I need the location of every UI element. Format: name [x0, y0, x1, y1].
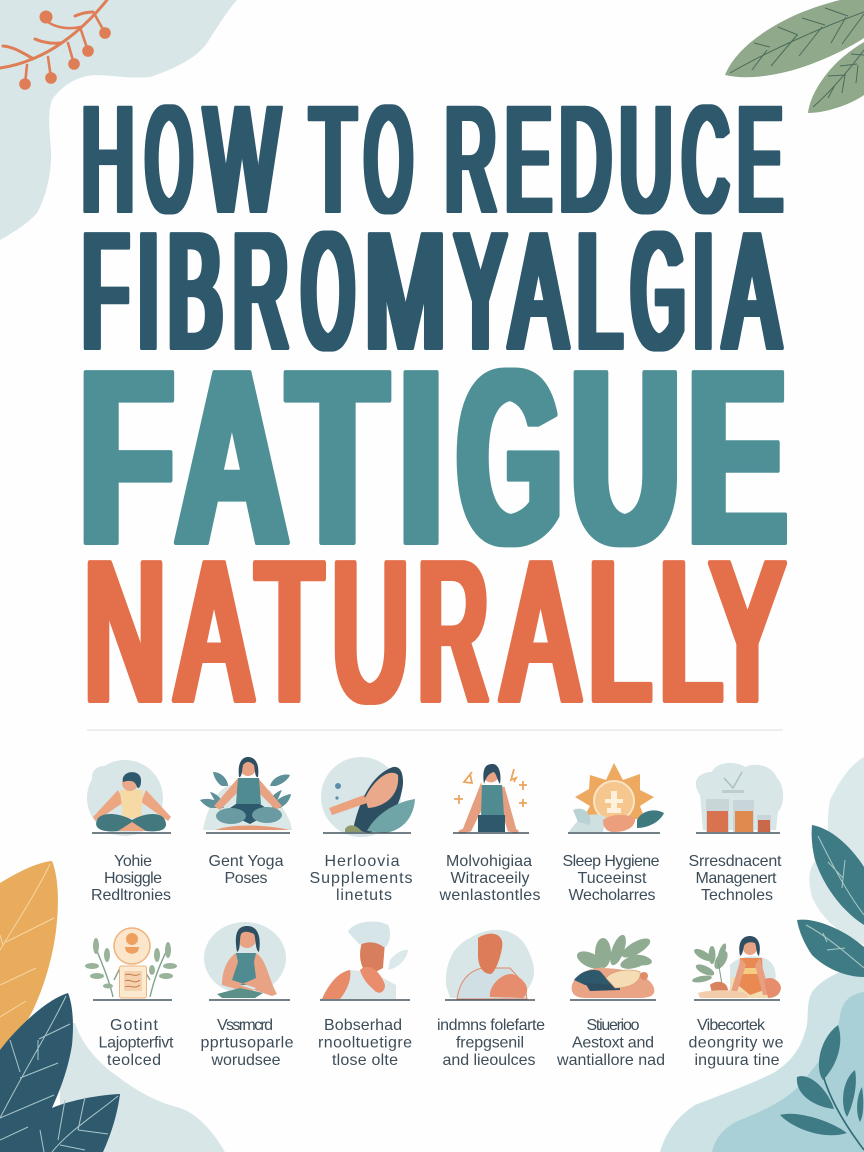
label: Yohie Hosiggle Redltronies: Redltronies	[91, 887, 171, 904]
top-left background blob	[0, 0, 237, 240]
title line: NATURALLY: T	[257, 521, 322, 743]
label: indmns folefarte frepgsenil and lieoulces	[437, 1017, 545, 1069]
title line: HOW TO REDUCE: U	[620, 75, 672, 243]
icon: person with towel turban	[320, 921, 410, 1000]
title line: FATIGUE: F	[80, 320, 173, 596]
icon: meditating woman	[87, 760, 171, 836]
icon: sun and bone	[568, 763, 664, 833]
title line: NATURALLY: A	[504, 521, 577, 743]
label: Molvohigiaa Witraceeily wenlastontles: wenlastontles	[438, 887, 540, 904]
title line: NATURALLY: U	[333, 521, 408, 743]
title line: NATURALLY: L	[589, 521, 650, 743]
label: Srresdnacent Managenert Technoles: Managenert	[696, 870, 777, 887]
title line: NATURALLY: N	[85, 521, 165, 743]
icon: person holding painful hand	[445, 930, 535, 1000]
label: Molvohigiaa Witraceeily wenlastontles	[438, 853, 540, 904]
label: Gotint Lajopterfivt teolced: Gotint	[110, 1017, 159, 1034]
label: Sleep Hygiene Tuceeinst Wecholarres: Sleep Hygiene	[562, 853, 660, 870]
label: Herloovia Supplements linetuts: Herloovia	[324, 853, 400, 870]
label: Bobserhad rnooltuetigre tlose olte: rnooltuetigre	[318, 1034, 412, 1052]
icon: woman with plant and orange dress	[692, 936, 781, 1000]
title line: HOW TO REDUCE: C	[683, 75, 728, 243]
title line: FIBROMYALGIA: F	[83, 200, 128, 382]
title line: FIBROMYALGIA: A	[511, 200, 566, 382]
title line: FATIGUE: E	[688, 320, 786, 596]
label: Vssrmcrd pprtusoparle worudsee	[200, 1017, 294, 1069]
title line: FIBROMYALGIA: B	[168, 200, 222, 382]
title line: FATIGUE: A	[176, 320, 287, 596]
title line: NATURALLY: Y	[712, 521, 783, 743]
title line: FATIGUE: T	[288, 320, 386, 596]
title line: FIBROMYALGIA: I	[694, 200, 713, 382]
title line: NATURALLY: R	[418, 521, 488, 743]
label: Vibecortek deongrity we inguura tine	[688, 1017, 784, 1069]
icon: herbs and bowl	[570, 933, 656, 1000]
bottom-right branch	[780, 1025, 864, 1150]
label: Bobserhad rnooltuetigre tlose olte: Bobserhad	[324, 1017, 402, 1034]
title line: FIBROMYALGIA: R	[234, 200, 288, 382]
title line: HOW TO REDUCE: T	[310, 75, 356, 243]
label: Vssrmcrd pprtusoparle worudsee: worudsee	[210, 1052, 281, 1069]
label: Bobserhad rnooltuetigre tlose olte	[318, 1017, 412, 1069]
title line: FIBROMYALGIA: O	[302, 200, 354, 382]
title line: HOW TO REDUCE: R	[445, 75, 496, 243]
text: E	[738, 75, 782, 243]
label: Molvohigiaa Witraceeily wenlastontles: Witraceeily	[450, 870, 530, 887]
label: Sleep Hygiene Tuceeinst Wecholarres: Tuceeinst	[578, 870, 647, 887]
title line: FIBROMYALGIA: M	[365, 200, 445, 382]
title line: FIBROMYALGIA: Y	[456, 200, 505, 382]
label: indmns folefarte frepgsenil and lieoulces: indmns folefarte	[437, 1017, 545, 1034]
label: Gent Yoga Poses	[208, 853, 284, 887]
label: Srresdnacent Managenert Technoles: Srresdnacent	[688, 853, 782, 870]
icon: woman with crossed arms	[204, 922, 290, 1000]
title line: FATIGUE: I	[400, 320, 442, 596]
text: A	[725, 200, 779, 382]
title line: FIBROMYALGIA: L	[577, 200, 621, 382]
label: Vibecortek deongrity we inguura tine: inguura tine	[694, 1052, 780, 1069]
label: Gent Yoga Poses: Gent Yoga	[208, 853, 284, 870]
label: Gotint Lajopterfivt teolced: Lajopterfivt	[98, 1034, 174, 1052]
label: Vibecortek deongrity we inguura tine: Vibecortek	[697, 1017, 766, 1034]
icon: gut plant card	[85, 928, 177, 1000]
label: Bobserhad rnooltuetigre tlose olte: tlose olte	[332, 1052, 398, 1069]
label: Stiuerioo Aestoxt and wantiallore nad: wantiallore nad	[556, 1052, 665, 1069]
title line: FIBROMYALGIA: I	[139, 200, 158, 382]
label: indmns folefarte frepgsenil and lieoulces: and lieoulces	[442, 1052, 536, 1069]
title line: HOW TO REDUCE: H	[82, 75, 134, 243]
top-right sage leaves	[725, 0, 864, 113]
label: Stiuerioo Aestoxt and wantiallore nad	[556, 1017, 665, 1069]
title line: HOW TO REDUCE: D	[560, 75, 611, 243]
label: Vibecortek deongrity we inguura tine: deongrity we	[688, 1034, 784, 1052]
label: Herloovia Supplements linetuts: linetuts	[336, 887, 392, 904]
label: Vssrmcrd pprtusoparle worudsee: Vssrmcrd	[217, 1017, 273, 1034]
title line: HOW TO REDUCE: E	[506, 75, 551, 243]
title line: FATIGUE: U	[571, 320, 680, 596]
label: Gotint Lajopterfivt teolced: teolced	[107, 1052, 161, 1069]
title line: NATURALLY: L	[660, 521, 721, 743]
label: Srresdnacent Managenert Technoles: Technoles	[701, 887, 773, 904]
bottom-left orange leaf	[0, 861, 58, 1052]
label: indmns folefarte frepgsenil and lieoulces: frepgsenil	[456, 1034, 524, 1052]
title line: FATIGUE: G	[458, 320, 562, 596]
label: Srresdnacent Managenert Technoles	[688, 853, 782, 904]
label: Gotint Lajopterfivt teolced	[98, 1017, 174, 1069]
label: Yohie Hosiggle Redltronies: Yohie	[114, 853, 152, 870]
label: Yohie Hosiggle Redltronies: Hosiggle	[104, 870, 162, 887]
icon: supplement jars	[696, 763, 783, 833]
title line: NATURALLY: A	[178, 521, 250, 743]
title line: FIBROMYALGIA: G	[632, 200, 685, 382]
label: Gent Yoga Poses: Poses	[224, 870, 268, 887]
label: Herloovia Supplements linetuts: Supplements	[310, 870, 412, 887]
title line: HOW TO REDUCE: O	[146, 75, 192, 243]
label: Yohie Hosiggle Redltronies	[91, 853, 171, 904]
label: Sleep Hygiene Tuceeinst Wecholarres	[562, 853, 660, 904]
title line: HOW TO REDUCE: W	[205, 75, 279, 243]
title line: HOW TO REDUCE: O	[365, 75, 412, 243]
bottom-left dark leaves	[0, 993, 120, 1152]
icon: herbal supplement hand	[321, 757, 415, 837]
label: Sleep Hygiene Tuceeinst Wecholarres: Wecholarres	[568, 887, 656, 904]
label: Herloovia Supplements linetuts	[310, 853, 412, 904]
bottom-left background blob	[60, 1023, 225, 1152]
top-left coral branch	[0, 0, 111, 90]
label: Vssrmcrd pprtusoparle worudsee: pprtusoparle	[200, 1034, 294, 1052]
icon: standing woman with sparkles	[453, 764, 529, 833]
icon: yoga pose	[200, 757, 292, 833]
right background blobs	[660, 757, 864, 1152]
label: Stiuerioo Aestoxt and wantiallore nad: Stiuerioo	[586, 1017, 640, 1034]
label: Molvohigiaa Witraceeily wenlastontles: Molvohigiaa	[446, 853, 532, 870]
right teal leaves	[797, 825, 864, 977]
label: Stiuerioo Aestoxt and wantiallore nad: Aestoxt and	[572, 1034, 654, 1052]
